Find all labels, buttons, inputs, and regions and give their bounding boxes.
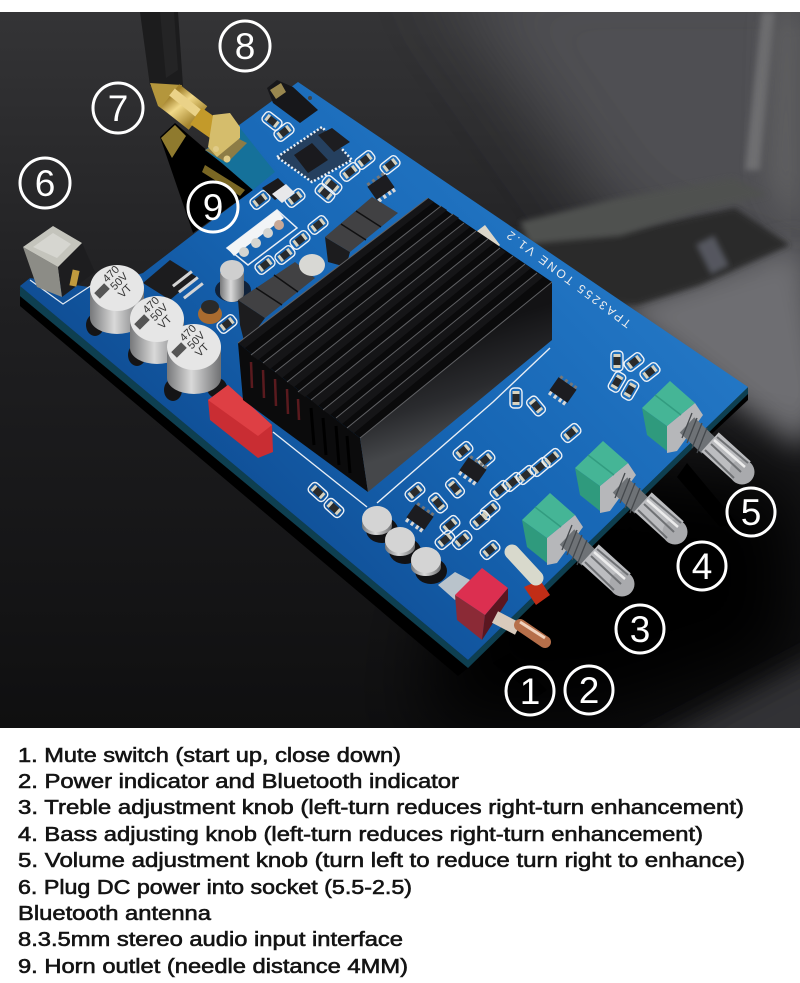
heat sink [238,198,552,492]
callout 7: 7 [108,88,128,129]
capacitor 470uF 3: 470 [178,323,199,344]
mute switch [438,568,545,642]
small capacitors [362,506,447,584]
Bluetooth module [277,127,352,182]
callout 9 [188,182,238,232]
numbered parts legend: 8.3.5mm stereo audio input interface [18,929,403,951]
callout 6 [20,158,70,208]
background object reflection [480,178,790,305]
callout 3 [616,605,664,653]
gold SMA connector [150,83,247,163]
callout 8: 8 [235,26,255,67]
circuit board: TPA3255 TONE V1.2 [502,227,634,331]
capacitor 470uF 3: VT [193,341,212,360]
callout 5 [727,488,775,536]
round silver capacitor [299,254,325,276]
volume knob [642,381,754,484]
numbered parts legend: 6. Plug DC power into socket (5.5-2.5) [18,877,412,899]
callout 1: 1 [520,671,540,712]
callout 7 [93,83,143,133]
white connector [472,225,500,255]
speaker outlet terminal [227,210,297,265]
numbered parts legend: 3. Treble adjustment knob (left-turn reduces right-turn enhancement) [18,797,744,819]
callout 8 [220,21,270,71]
numbered parts legend: Bluetooth antenna [18,903,212,925]
callout 2: 2 [579,670,599,711]
reflection of the antenna connector [160,123,253,233]
treble knob [522,493,634,596]
capacitor 470uF 1: 50V [108,270,131,293]
capacitor 470uF 1: 470 [101,264,122,285]
capacitor 470uF 3 [167,321,221,394]
callout 1 [506,667,554,715]
callout 4 [678,542,726,590]
capacitor 470uF 1: VT [116,282,135,301]
numbered parts legend: 5. Volume adjustment knob (turn left to reduce turn right to enhance) [18,850,745,872]
capacitor 470uF 2: 50V [148,301,171,324]
callout 9: 9 [203,187,223,228]
antenna [140,12,183,86]
numbered parts legend: 4. Bass adjusting knob (left-turn reduces right-turn enhancement) [18,824,703,846]
numbered parts legend [18,745,745,978]
lower transistor row [238,262,315,345]
photo background [0,0,800,760]
audio jack [267,80,318,123]
circuit board [20,82,748,668]
product photo with numbered callouts [0,12,800,728]
capacitor 470uF 3: 50V [185,329,208,352]
surface mount parts [215,110,662,561]
bass knob [575,441,688,544]
capacitor 470uF 2: 470 [141,295,162,316]
upper transistor row [325,197,398,267]
capacitor 470uF 2 [130,293,184,364]
callout 3: 3 [630,609,650,650]
capacitor 470uF 2: VT [156,313,175,332]
callout 2 [565,666,613,714]
callout 5: 5 [741,492,761,533]
callout 6: 6 [35,163,55,204]
numbered parts legend: 1. Mute switch (start up, close down) [18,745,401,767]
capacitor 470uF 1 [90,262,144,334]
indicator LED [512,552,550,605]
DC power socket [23,226,95,297]
callout 4: 4 [692,546,712,587]
red film capacitor [208,385,273,458]
knob and toggle shadows [20,296,748,697]
power parts near capacitors [86,260,251,401]
numbered parts legend: 9. Horn outlet (needle distance 4MM) [18,956,408,978]
numbered parts legend: 2. Power indicator and Bluetooth indicator [18,771,459,793]
